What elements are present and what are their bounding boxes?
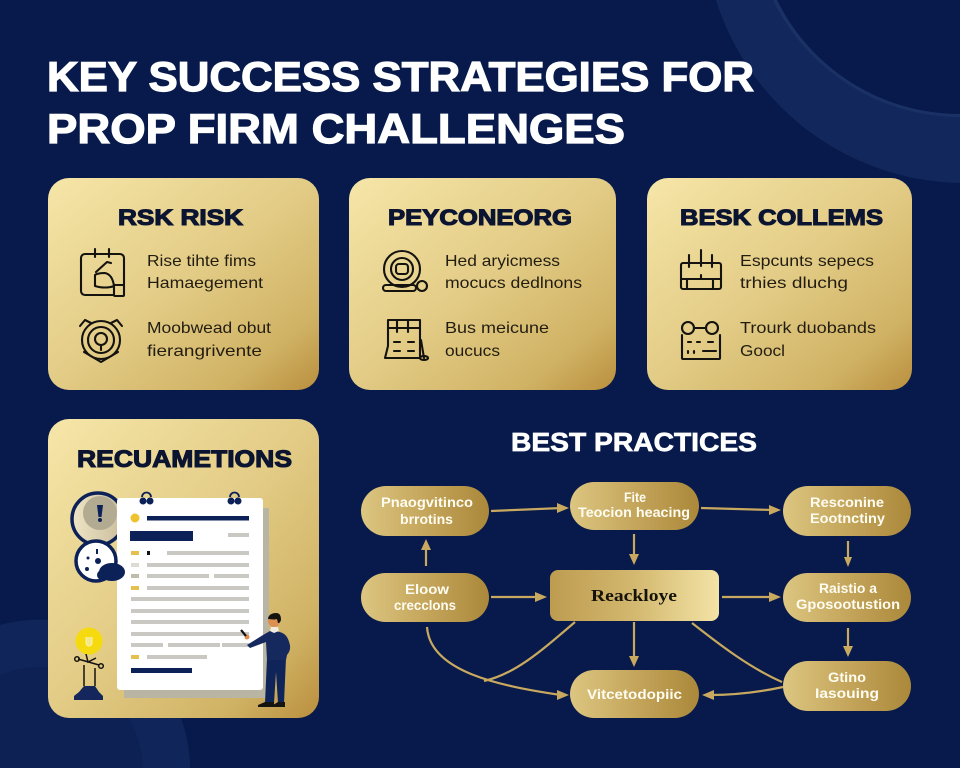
text: psychology item two — [445, 320, 549, 360]
icon: dashboard with dials — [682, 322, 720, 359]
document header — [130, 514, 249, 541]
panel heading: psychology: PEYCONEORG — [388, 205, 572, 230]
panel: psychology — [349, 178, 616, 390]
title — [47, 53, 754, 152]
node: middle left — [361, 573, 489, 622]
panel: risk — [48, 178, 319, 390]
icon: moon gauge with cloud — [76, 541, 125, 581]
node: top right: Resconine — [810, 495, 885, 510]
node: top left: brrotins — [400, 512, 453, 527]
panel heading: risk: RSK RISK — [118, 205, 243, 230]
text: risk item one — [147, 253, 264, 292]
node: centre — [550, 570, 719, 621]
text: psychology item one: Hed aryicmess — [445, 253, 560, 270]
document sheet — [117, 492, 269, 698]
document rings — [140, 492, 242, 504]
text: risk item two: fierangrivente — [147, 343, 262, 360]
document rows — [131, 551, 249, 673]
panel heading: best columns: BESK COLLEMS — [680, 205, 883, 230]
text: best columns item two: Trourk duobands — [740, 320, 876, 337]
panel heading: recommendations: RECUAMETIONS — [77, 446, 292, 473]
person pointing — [241, 613, 290, 707]
icon: calendar house — [81, 249, 124, 296]
node: middle right: Gposootustion — [796, 597, 900, 612]
text: best columns item one — [740, 253, 874, 292]
node: bottom right: Gtino — [828, 670, 866, 685]
node: top left — [361, 486, 489, 536]
text: risk item two: Moobwead obut — [147, 320, 272, 337]
icon: target shield — [80, 320, 122, 362]
node: top centre — [570, 482, 699, 530]
heading: best practices: BEST PRACTICES — [511, 427, 757, 457]
text: psychology item one — [445, 253, 582, 292]
node: top left: Pnaogvitinco — [381, 495, 473, 510]
node: middle left: Eloow — [405, 582, 450, 597]
node: middle right — [783, 573, 911, 622]
node: bottom right — [783, 661, 911, 711]
panel: recommendations — [48, 419, 319, 718]
title: KEY SUCCESS STRATEGIES FOR — [47, 53, 754, 100]
text: risk item two — [147, 320, 272, 360]
node: top centre: Fite — [624, 490, 646, 505]
text: risk item one: Hamaegement — [147, 275, 264, 292]
flowchart — [361, 482, 911, 718]
icon: disc device — [383, 251, 427, 291]
connectors — [421, 503, 853, 700]
text: psychology item two: Bus meicune — [445, 320, 549, 337]
icon: checklist board — [385, 320, 428, 360]
icon: warning clock — [72, 493, 124, 545]
node: bottom right: Iasouing — [815, 686, 879, 701]
icon: light bulb on stand — [74, 628, 103, 700]
text: psychology item two: oucucs — [445, 343, 500, 360]
text: psychology item one: mocucs dedlnons — [445, 275, 582, 292]
icon: briefcase calendar — [681, 250, 721, 289]
text: best columns item one: Espcunts sepecs — [740, 253, 874, 270]
node: bottom centre: Vitcetodopiic — [587, 687, 683, 702]
node: top centre: Teocion heacing — [578, 505, 690, 520]
node: centre: Reackloye — [591, 586, 678, 605]
node: top right: Eootnctiny — [810, 511, 886, 526]
text: best columns item two: Goocl — [740, 343, 785, 360]
node: bottom centre — [570, 670, 699, 718]
text: best columns item one: trhies dluchg — [740, 275, 848, 292]
node: middle right: Raistio a — [819, 581, 877, 596]
title: PROP FIRM CHALLENGES — [47, 105, 625, 152]
panel: best columns — [647, 178, 912, 390]
text: risk item one: Rise tihte fims — [147, 253, 256, 270]
node: middle left: crecclons — [394, 598, 456, 613]
node: top right — [783, 486, 911, 536]
text: best columns item two — [740, 320, 876, 360]
